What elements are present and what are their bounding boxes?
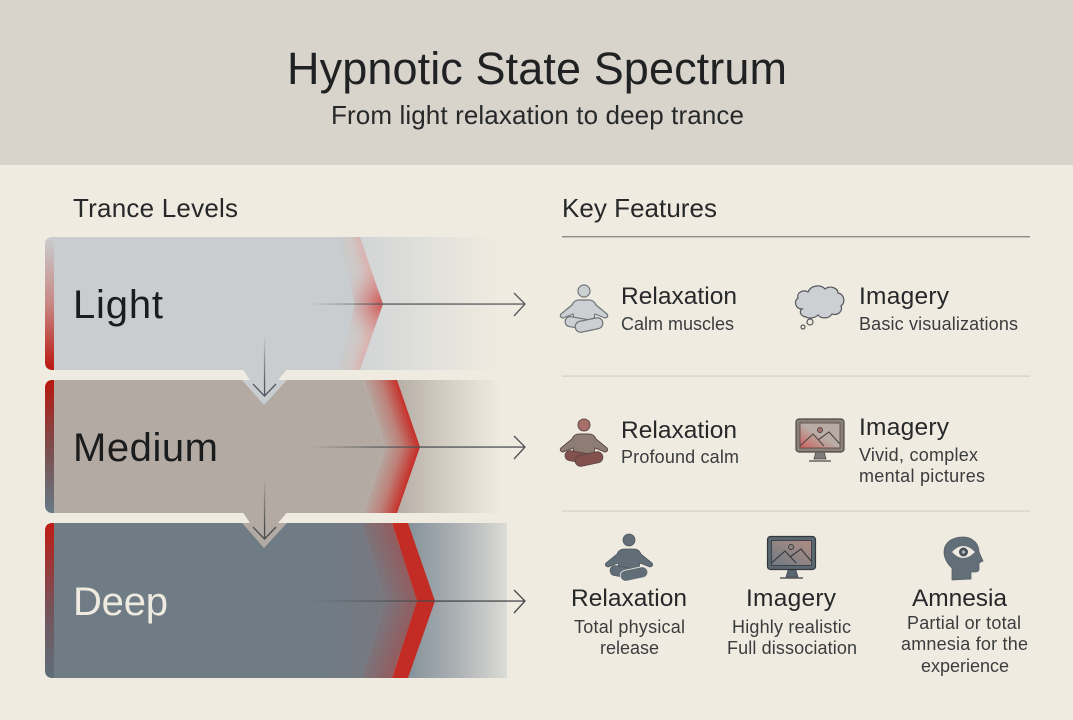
icon: thought cloud [795,286,844,329]
text: deep amnesia: amnesia for the [901,634,1028,654]
text: deep imagery: Full dissociation [727,638,857,658]
connector chevron: medium to deep [242,512,287,548]
divider lines [562,236,1030,512]
band: deep [45,523,507,678]
text: light relaxation: Relaxation [621,283,737,310]
icon: meditation deep [605,534,653,582]
arrow: deep to features [310,590,525,613]
text: deep relaxation [571,585,687,658]
text: deep amnesia [901,585,1028,676]
arrow: medium to features [310,436,525,459]
title: Hypnotic State Spectrum [287,43,787,94]
icon: meditation light [560,285,608,333]
icon: head with eye [944,537,983,580]
text: light relaxation [621,283,737,334]
arrow: light to medium [253,335,276,396]
text: medium imagery: Imagery [859,414,950,441]
text: medium relaxation: Relaxation [621,417,737,444]
text: medium imagery [859,414,985,486]
text: deep imagery: Imagery [746,585,837,612]
label: light: Light [73,283,163,327]
text: deep amnesia: Partial or total [907,613,1021,633]
band: light [45,237,500,370]
arrow: medium to deep [253,478,276,539]
text: deep amnesia: experience [921,656,1009,676]
connector chevron: light to medium [242,370,287,405]
text: medium relaxation [621,417,739,467]
text: light relaxation: Calm muscles [621,314,734,334]
text: light imagery [859,283,1018,334]
text: deep relaxation: Relaxation [571,585,687,612]
text: medium imagery: Vivid, complex [859,445,978,465]
text: deep amnesia: Amnesia [912,585,1007,612]
text: medium relaxation: Profound calm [621,447,739,467]
band: medium [45,380,500,513]
text: deep imagery [727,585,857,658]
text: deep relaxation: release [600,638,659,658]
text: light imagery: Imagery [859,283,950,310]
icon: monitor medium [796,419,844,461]
heading: key features: Key Features [562,193,717,223]
subtitle: From light relaxation to deep trance [331,100,744,130]
label: deep: Deep [73,580,168,624]
header band [0,0,1073,165]
text: deep imagery: Highly realistic [732,617,851,637]
text: medium imagery: mental pictures [859,466,985,486]
text: deep relaxation: Total physical [574,617,685,637]
icon: meditation medium [560,419,608,467]
heading: trance levels: Trance Levels [73,193,238,223]
text: light imagery: Basic visualizations [859,314,1018,334]
arrow: light to features [310,293,525,316]
icon: monitor deep [768,536,816,578]
label: medium: Medium [73,426,218,470]
